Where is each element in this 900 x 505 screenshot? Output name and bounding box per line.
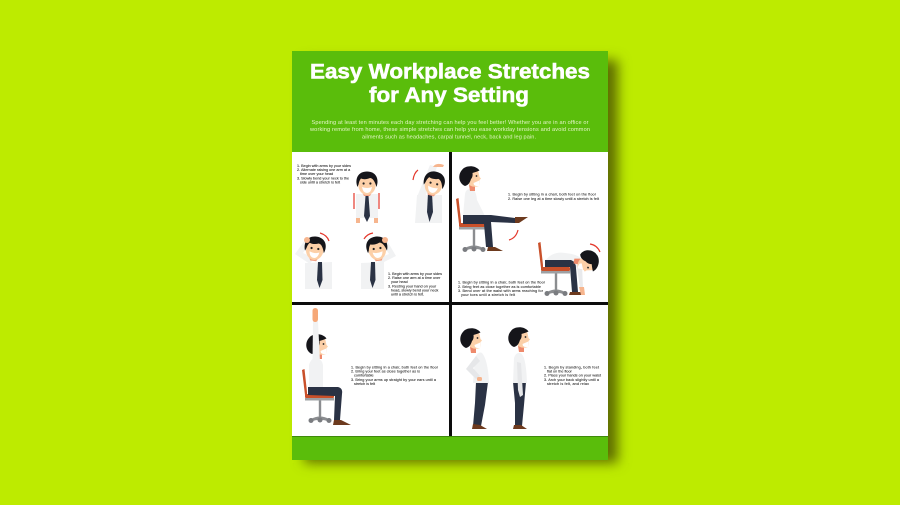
poster [292, 51, 608, 460]
instructions: neck stretch one: 3. Slowly bend your neck to the [297, 176, 349, 180]
instructions: standing back arch: 3. Arch your back slightly until a [544, 378, 600, 382]
instructions: neck stretch two [388, 272, 442, 296]
instructions: seated arm raise: comfortable [354, 374, 374, 378]
figure: standing side view [508, 327, 530, 429]
footer band [292, 436, 608, 460]
figure: standing arms down [354, 172, 379, 223]
instructions: standing back arch: 2. Place your hands on your waist [544, 374, 602, 378]
figure: hand on head, tilted right [361, 233, 396, 289]
instructions: neck stretch one: time over your head [300, 172, 333, 176]
instructions: neck stretch two: head, slowly bend your neck [391, 288, 438, 292]
header band [292, 51, 608, 460]
instructions: seated leg raise [508, 192, 600, 201]
instructions: seated arm raise: 3. Bring your arms up straight by your ears until a [351, 378, 437, 382]
instructions: neck stretch one [297, 164, 351, 184]
panel grid divider [292, 152, 608, 436]
figure: seated forward bend [538, 242, 601, 296]
instructions: seated arm raise: 2. Bring your feet as close together as is [351, 370, 420, 374]
instructions: neck stretch two: 3. Resting your hand on your [388, 284, 437, 288]
figure: arm raised over head [413, 164, 447, 223]
instructions: standing back arch [544, 366, 602, 386]
title [310, 60, 590, 107]
poster shadow [304, 60, 618, 463]
intro text [309, 120, 590, 140]
instructions: neck stretch one: 1. Begin with arms by your sides [297, 164, 351, 168]
instructions: standing back arch: stretch is felt, and relax [547, 382, 589, 386]
instructions: seated forward bend: 1. Begin by sitting in a chair, both feet on the floor [458, 280, 546, 284]
figure: seated arm raise [302, 308, 351, 425]
instructions: seated leg raise: 2. Raise one leg at a time slowly until a stretch is felt [508, 197, 600, 201]
panel: neck stretches [292, 152, 449, 302]
figure: standing back arch, hands on waist [460, 328, 489, 429]
instructions: seated forward bend: 2. Bring feet as close together as is comfortable [458, 285, 541, 289]
intro text: working remote from home, these simple stretches can help you ease workday tensions and avoid common [309, 127, 590, 133]
instructions: neck stretch two: 1. Begin with arms by your sides [388, 272, 442, 276]
title: for Any Setting [369, 83, 529, 107]
panel: seated leg stretches [452, 152, 608, 302]
instructions: seated forward bend: your toes until a stretch is felt [461, 293, 516, 297]
instructions: seated arm raise: 1. Begin by sitting in a chair, both feet on the floor [351, 366, 439, 370]
instructions: neck stretch one: 2. Alternate raising one arm at a [297, 168, 351, 172]
instructions: neck stretch two: 2. Raise one arm at a time over [388, 276, 441, 280]
title: Easy Workplace Stretches [310, 60, 590, 84]
instructions: standing back arch: 1. Begin by standing, both feet [544, 366, 600, 370]
intro text: Spending at least ten minutes each day stretching can help you feel better! Whether you are in an office or [312, 120, 589, 126]
instructions: neck stretch two: your head [391, 280, 408, 284]
figure: seated leg raise [456, 166, 528, 252]
instructions: standing back arch: flat on the floor [547, 370, 573, 374]
instructions: seated leg raise: 1. Begin by sitting in a chair, both feet on the floor [508, 192, 597, 196]
intro text: ailments such as headaches, carpal tunnel, neck, back and leg pain. [362, 134, 536, 140]
instructions: neck stretch two: until a stretch is felt. [391, 292, 424, 296]
instructions: seated arm raise: stretch is felt [354, 382, 376, 386]
instructions: seated forward bend [458, 280, 546, 297]
panel: standing back arch [452, 305, 608, 436]
instructions: seated arm raise [351, 366, 439, 386]
instructions: neck stretch one: side until a stretch is felt [300, 180, 341, 184]
figure: hand on head, tilted left [295, 233, 332, 289]
panel: seated arm raise [292, 305, 449, 436]
instructions: seated forward bend: 3. Bend over at the waist with arms reaching for [458, 289, 544, 293]
